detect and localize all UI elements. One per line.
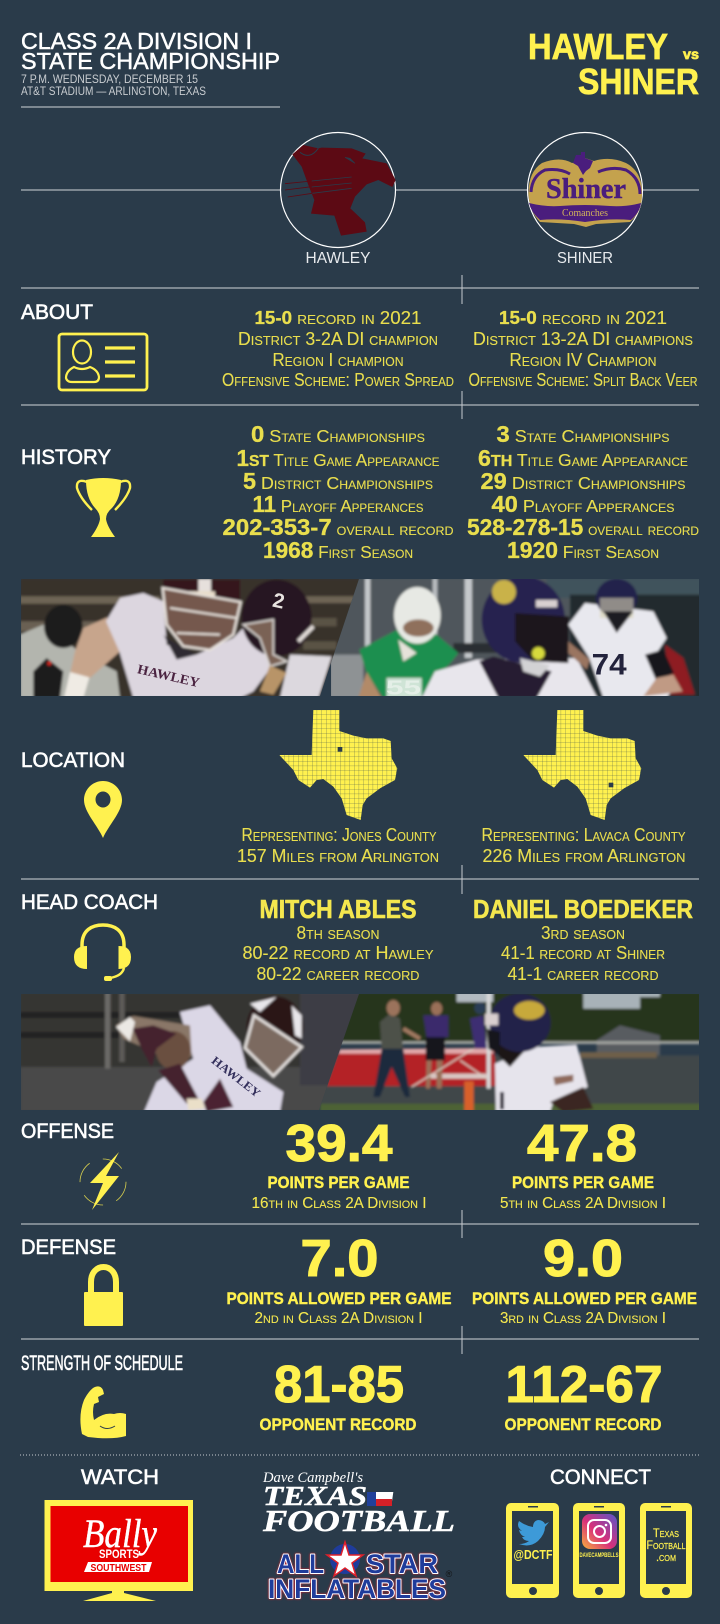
Hawley offense (252, 1115, 426, 1212)
heading: strength of schedule: STRENGTH OF SCHEDULE (21, 1352, 183, 1375)
Shiner location text (482, 825, 686, 866)
Hawley history: 202-353-7 overall record (222, 514, 454, 540)
logo: Shiner Comanches (528, 132, 642, 248)
Hawley coach: MITCH ABLES (260, 894, 416, 924)
map: Texas with Lavaca County (521, 708, 644, 823)
Shiner coach (473, 894, 693, 984)
Hawley location text: Representing: Jones County (242, 825, 437, 845)
photo: Hawley receiver (20, 992, 363, 1112)
Shiner history: 528-278-15 overall record (467, 514, 699, 540)
Hawley offense: 16th in Class 2A Division I (252, 1195, 426, 1212)
logo: Dave Campbell's Texas Football (262, 1470, 455, 1538)
icon: television with Bally Sports Southwest: Bally (83, 1511, 157, 1556)
logo: Dave Campbell's Texas Football: Dave Campbell's (262, 1470, 363, 1486)
Shiner location text: 226 Miles from Arlington (482, 846, 686, 866)
title: CLASS 2A DIVISION I (21, 28, 252, 54)
Hawley defense: 2nd in Class 2A Division I (254, 1310, 422, 1327)
logo: Dave Campbell's Texas Football: FOOTBALL (262, 1503, 455, 1538)
icon: padlock (84, 1267, 123, 1326)
game details: 7 P.M. WEDNESDAY, DECEMBER 15 (21, 74, 198, 86)
Hawley defense: POINTS ALLOWED PER GAME (226, 1289, 452, 1308)
Hawley history (222, 421, 454, 563)
photo: Hawley player: 2 (271, 589, 287, 614)
heading: offense: OFFENSE (21, 1120, 114, 1143)
panel: location (21, 708, 686, 866)
icon: id card (59, 334, 147, 390)
Shiner defense: 3rd in Class 2A Division I (500, 1310, 666, 1327)
Hawley history: 0 State Championships (251, 421, 425, 447)
icon: television with Bally Sports Southwest (44, 1500, 193, 1601)
Hawley about text: Offensive Scheme: Power Spread (222, 370, 454, 390)
Hawley location text (237, 825, 439, 866)
Shiner coach: DANIEL BOEDEKER (473, 894, 693, 924)
Hawley history: 11 Playoff Apperances (252, 491, 424, 517)
icon: phone with Twitter: @DCTF (514, 1547, 553, 1562)
game details (21, 74, 206, 98)
icon: lightning bolt (80, 1152, 126, 1210)
title: STATE CHAMPIONSHIP (21, 48, 280, 74)
Hawley strength (260, 1356, 416, 1434)
icon: phone with website: Football (646, 1538, 686, 1552)
Hawley about text: 15-0 record in 2021 (254, 308, 422, 328)
panel: history (21, 421, 699, 563)
logo: All Star Inflatables: STAR (366, 1549, 438, 1579)
panel: strength of schedule (21, 1352, 662, 1438)
Hawley defense (226, 1230, 452, 1327)
Shiner coach: 41-1 record at Shiner (501, 943, 665, 963)
icon: phone with website (640, 1503, 692, 1598)
Shiner strength: OPPONENT RECORD (504, 1415, 662, 1434)
Shiner strength: 112-67 (506, 1356, 662, 1414)
icon: headset (74, 925, 131, 981)
logo: Hawley panther (280, 132, 396, 248)
Hawley location text: 157 Miles from Arlington (237, 846, 439, 866)
Hawley strength: OPPONENT RECORD (260, 1415, 416, 1434)
Shiner location text: Representing: Lavaca County (482, 825, 686, 845)
photo strip: action shots (20, 992, 702, 1112)
title (21, 28, 280, 74)
panel: watch (44, 1466, 193, 1601)
Shiner about text: District 13-2A DI champions (473, 329, 693, 349)
logo: All Star Inflatables: ALL (277, 1549, 324, 1579)
Hawley history: 5 District Championships (243, 468, 433, 494)
panel: defense (21, 1230, 697, 1327)
Shiner history: 3 State Championships (496, 421, 670, 447)
Shiner offense (500, 1115, 666, 1212)
icon: trophy (77, 478, 130, 537)
photo: Shiner players (320, 576, 702, 700)
logo: All Star Inflatables: INFLATABLES (268, 1574, 446, 1604)
Hawley offense: POINTS PER GAME (268, 1173, 410, 1192)
game details: AT&T STADIUM — ARLINGTON, TEXAS (21, 86, 206, 98)
photo: Shiner players: 74 (592, 649, 627, 682)
panel: connect (506, 1466, 692, 1598)
photo strip: Hawley and Shiner players (20, 576, 702, 700)
Hawley about text (222, 308, 454, 390)
matchup heading: vs (683, 46, 699, 62)
heading: history: HISTORY (21, 446, 111, 469)
Shiner about text (468, 308, 698, 390)
photo: Hawley receiver: HAWLEY (209, 1053, 264, 1100)
photo: Shiner sideline (320, 992, 702, 1112)
icon: phone with Instagram (573, 1503, 625, 1598)
Hawley coach: 80-22 career record (256, 964, 420, 984)
icon: television with Bally Sports Southwest: SOUTHWEST (90, 1563, 146, 1574)
photo: Shiner players: 55 (386, 678, 421, 700)
Hawley history: 1968 First Season (263, 537, 413, 563)
Hawley defense: 7.0 (300, 1230, 378, 1288)
logo: Dave Campbell's Texas Football: TEXAS (263, 1481, 367, 1511)
Shiner offense: POINTS PER GAME (512, 1173, 654, 1192)
Shiner defense: 9.0 (543, 1230, 623, 1288)
Shiner coach: 3rd season (541, 923, 625, 943)
map: Texas with Jones County (277, 708, 400, 823)
logo: Shiner Comanches: Shiner (546, 174, 626, 205)
matchup heading: HAWLEY (528, 26, 668, 67)
Shiner about text: Region IV Champion (510, 350, 656, 370)
icon: map pin (84, 781, 122, 838)
Hawley about text: District 3-2A DI champion (238, 329, 438, 349)
Hawley coach: 80-22 record at Hawley (242, 943, 434, 963)
Shiner defense (472, 1230, 697, 1327)
team names: SHINER (557, 250, 613, 267)
matchup heading (528, 26, 699, 102)
heading: about: ABOUT (21, 301, 93, 324)
panel: about (21, 301, 698, 390)
Shiner coach: 41-1 career record (508, 964, 658, 984)
panel: offense (21, 1115, 666, 1212)
Hawley history: 1st Title Game Appearance (236, 445, 440, 471)
Shiner offense: 47.8 (527, 1115, 637, 1173)
Hawley coach: 8th season (296, 923, 380, 943)
icon: phone with website: .com (656, 1550, 676, 1564)
Hawley about text: Region I champion (272, 350, 404, 370)
Shiner history: 1920 First Season (507, 537, 659, 563)
heading: defense: DEFENSE (21, 1236, 116, 1259)
photo: Hawley player (20, 578, 363, 698)
Hawley strength: 81-85 (274, 1356, 404, 1414)
icon: television with Bally Sports Southwest: SPORTS (99, 1547, 139, 1561)
Shiner history: 6th Title Game Appearance (478, 445, 688, 471)
Hawley offense: 39.4 (286, 1115, 393, 1173)
heading: connect: CONNECT (550, 1466, 651, 1489)
Hawley coach (242, 894, 434, 984)
icon: phone with website: Texas (653, 1526, 679, 1540)
logo: All Star Inflatables: ® (446, 1569, 453, 1579)
team names: HAWLEY (306, 250, 371, 267)
icon: phone with Instagram: DAVECAMPBELLS (580, 1553, 618, 1559)
Shiner history: 40 Playoff Apperances (492, 491, 674, 517)
Shiner about text: 15-0 record in 2021 (499, 308, 667, 328)
logo: Shiner Comanches: Comanches (562, 208, 608, 219)
heading: head coach: HEAD COACH (21, 891, 158, 914)
team names (306, 250, 613, 267)
Shiner history: 29 District Championships (480, 468, 686, 494)
icon: phone with Twitter (506, 1503, 559, 1598)
heading: watch: WATCH (81, 1466, 159, 1489)
heading: location: LOCATION (21, 749, 125, 772)
Shiner defense: POINTS ALLOWED PER GAME (472, 1289, 697, 1308)
logo: All Star Inflatables (268, 1542, 453, 1604)
Shiner history (467, 421, 699, 563)
icon: flexed arm (80, 1386, 126, 1438)
matchup heading: SHINER (578, 61, 699, 102)
photo: Hawley player: HAWLEY (136, 661, 201, 690)
Shiner offense: 5th in Class 2A Division I (500, 1195, 666, 1212)
panel: head coach (21, 891, 693, 984)
